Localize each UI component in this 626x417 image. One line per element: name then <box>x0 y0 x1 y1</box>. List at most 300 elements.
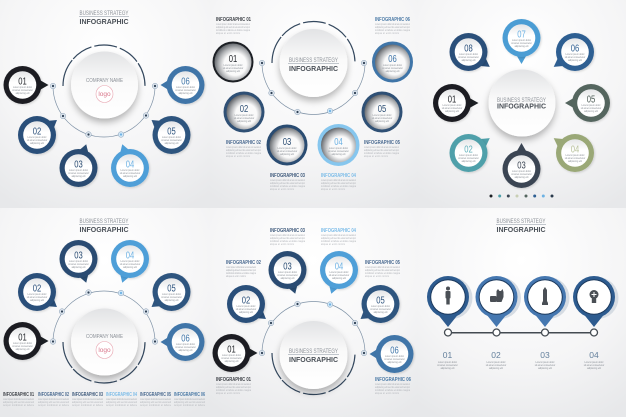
pin 03 <box>524 276 570 336</box>
label 01: INFOGRAPHIC 01 <box>216 377 251 383</box>
step 02: Lorem ipsum dolor <box>486 361 506 364</box>
center disc: title: INFOGRAPHIC <box>289 355 339 364</box>
icon: tower <box>542 287 548 305</box>
label 04: Lorem ipsum dolor sit amet consectetur <box>321 234 356 237</box>
bubble 04: adipiscing elit <box>123 175 137 178</box>
step 04: 04 <box>589 350 599 360</box>
bubble 02: 02 <box>33 284 42 294</box>
bubble 04: Lorem ipsum dolor <box>565 154 585 157</box>
bubble 05: sit amet consectetur <box>581 107 602 110</box>
center disc: title <box>280 321 348 389</box>
label 01 <box>216 377 252 395</box>
bubble 03: adipiscing elit <box>72 175 86 178</box>
label row <box>3 392 206 407</box>
center disc: company logo <box>71 308 138 376</box>
bubble 04: 04 <box>126 250 135 262</box>
bubble 07 <box>502 19 540 64</box>
bubble 03: sit amet consectetur <box>277 274 298 277</box>
icon: bulb <box>590 290 598 303</box>
bubble 05: adipiscing elit <box>165 142 179 145</box>
label 04: INFOGRAPHIC 04 <box>321 228 356 234</box>
bubble 04: sit amet consectetur <box>120 172 141 175</box>
label 06: incididunt ut labore et dolore magna <box>375 29 411 32</box>
center disc: title: INFOGRAPHIC <box>497 102 547 110</box>
bubble 04 <box>111 142 149 187</box>
node markers <box>259 301 367 356</box>
icon: puzzle and cat <box>490 289 504 302</box>
label 05: INFOGRAPHIC 05 <box>365 260 400 266</box>
bubble 05: Lorem ipsum dolor <box>162 293 181 296</box>
bubble 06 <box>549 33 594 73</box>
panel: top-left radial infographic <box>0 0 209 208</box>
label 05: incididunt ut labore et dolore magna <box>365 272 401 275</box>
center disc: title: BUSINESS STRATEGY <box>497 97 546 104</box>
bubble 06: Lorem ipsum dolor <box>385 355 404 358</box>
label row: adipiscing elit sed do eiusmod <box>3 401 35 404</box>
bubble 06: Lorem ipsum dolor <box>176 86 195 89</box>
label 02: INFOGRAPHIC 02 <box>226 260 261 266</box>
label row: Lorem ipsum dolor sit amet consectetur <box>38 398 69 401</box>
bubble 08: Lorem ipsum dolor <box>459 53 478 56</box>
node markers <box>50 83 158 137</box>
label row: adipiscing elit sed do eiusmod <box>174 401 206 404</box>
bubble 01: adipiscing elit <box>445 110 459 113</box>
pin 01 <box>427 276 472 336</box>
label row: tempor incididunt ut labore <box>72 404 104 407</box>
bubble 02 <box>227 285 271 325</box>
bubble 05 <box>565 84 610 122</box>
bubble 06 <box>370 335 414 373</box>
ring 04: adipiscing elit <box>332 153 346 156</box>
label row: Lorem ipsum dolor sit amet consectetur <box>106 398 137 401</box>
bubble 01: adipiscing elit <box>16 348 30 351</box>
node markers <box>259 60 367 115</box>
ring 01: adipiscing elit <box>226 70 240 73</box>
pin 04 <box>573 276 618 336</box>
label row: Lorem ipsum dolor sit amet consectetur <box>174 398 205 401</box>
bubble 03: sit amet consectetur <box>68 172 89 175</box>
step 04: sit amet consectetur <box>584 364 605 367</box>
bubble 04 <box>320 251 358 296</box>
label row: tempor incididunt ut labore <box>174 404 206 407</box>
bubble 04 <box>111 240 149 285</box>
bubble 04: 04 <box>126 160 135 170</box>
bubble 02 <box>450 132 494 172</box>
bubble 04: Lorem ipsum dolor <box>120 260 140 263</box>
label 03: adipiscing elit sed do eiusmod tempor <box>270 237 305 240</box>
panel: top-right eight-step infographic <box>417 0 626 208</box>
step 01: sit amet consectetur <box>437 364 458 367</box>
title <box>79 218 129 234</box>
label 03: Lorem ipsum dolor sit amet consectetur <box>270 179 305 182</box>
bubble 02: 02 <box>464 144 473 156</box>
title: INFOGRAPHIC <box>80 17 129 26</box>
label 05: adipiscing elit sed do eiusmod tempor <box>365 269 400 272</box>
label 02 <box>226 260 261 278</box>
label 02: incididunt ut labore et dolore magna <box>226 152 262 155</box>
bubble 03: Lorem ipsum dolor <box>69 260 88 263</box>
ring 05: sit amet consectetur <box>372 117 393 120</box>
panel: bottom-middle arch infographic with labels <box>209 208 417 417</box>
bubble 05: adipiscing elit <box>584 110 598 113</box>
label row: INFOGRAPHIC 01 <box>3 392 34 398</box>
bubble 06: 06 <box>571 44 580 54</box>
label row: adipiscing elit sed do eiusmod <box>106 401 138 404</box>
bubble 01: 01 <box>227 344 236 356</box>
step 01 <box>437 350 458 370</box>
bubble 02: adipiscing elit <box>462 160 476 163</box>
ring 01 <box>212 42 254 82</box>
bubble 08 <box>450 33 494 73</box>
bubble 04: adipiscing elit <box>568 160 582 163</box>
label 02 <box>226 140 262 158</box>
center disc: title: INFOGRAPHIC <box>289 64 339 73</box>
ring 06: Lorem ipsum dolor <box>383 64 402 67</box>
bubble 01: sit amet consectetur <box>221 357 242 360</box>
bubble 04: sit amet consectetur <box>329 274 350 277</box>
bubble 06: adipiscing elit <box>568 59 582 62</box>
bubble 01 <box>212 334 258 372</box>
ring 02: sit amet consectetur <box>234 117 255 120</box>
center disc: title: BUSINESS STRATEGY <box>289 348 338 355</box>
bubble 01 <box>433 84 478 122</box>
bubble 06: 06 <box>181 334 190 344</box>
bubble 03: Lorem ipsum dolor <box>512 170 531 173</box>
label 02: Lorem ipsum dolor sit amet consectetur <box>226 146 261 149</box>
bubble 05: Lorem ipsum dolor <box>581 104 601 107</box>
label row: adipiscing elit sed do eiusmod <box>38 401 70 404</box>
bubble 08: sit amet consectetur <box>458 56 479 59</box>
bubble 04: sit amet consectetur <box>120 263 141 266</box>
bubble 06 <box>160 323 204 361</box>
label row: Lorem ipsum dolor sit amet consectetur <box>3 398 34 401</box>
step 01: 01 <box>443 350 452 360</box>
ring 03: sit amet consectetur <box>277 150 298 153</box>
step 03: 03 <box>540 350 550 360</box>
bubble 02: adipiscing elit <box>30 299 44 302</box>
bubble 03 <box>60 142 98 187</box>
bubble 03: 03 <box>74 160 83 170</box>
label 04: INFOGRAPHIC 04 <box>321 173 356 179</box>
step 04 <box>584 350 605 370</box>
center disc: title <box>280 29 348 97</box>
label 04: adipiscing elit sed do eiusmod tempor <box>321 237 356 240</box>
connector arcs <box>53 45 155 137</box>
label 06: adipiscing elit sed do eiusmod tempor <box>375 26 410 29</box>
bubble 06: adipiscing elit <box>179 349 193 352</box>
title <box>79 10 129 26</box>
bubble 05 <box>147 273 190 313</box>
bubble 02: Lorem ipsum dolor <box>236 305 256 308</box>
bubble 06: adipiscing elit <box>388 361 402 364</box>
label row: INFOGRAPHIC 03 <box>72 392 103 398</box>
label 04: incididunt ut labore et dolore magna <box>321 185 357 188</box>
label 01: INFOGRAPHIC 01 <box>216 17 251 23</box>
bubble 06: sit amet consectetur <box>175 346 196 349</box>
bubble 01 <box>4 66 48 104</box>
bubble 02: 02 <box>33 126 42 138</box>
bubble 03: 03 <box>283 262 292 272</box>
label row: Lorem ipsum dolor sit amet consectetur <box>72 398 103 401</box>
label 04: adipiscing elit sed do eiusmod tempor <box>321 182 356 185</box>
bubble 02: sit amet consectetur <box>27 296 48 299</box>
panel: top-middle radial infographic with labels <box>209 0 417 208</box>
bubble 01: Lorem ipsum dolor <box>13 342 32 345</box>
title: BUSINESS STRATEGY <box>496 218 546 225</box>
bubble 04 <box>549 132 594 172</box>
bubble 03: adipiscing elit <box>515 176 529 179</box>
label 05: Lorem ipsum dolor sit amet consectetur <box>365 266 400 269</box>
connector arcs <box>262 302 365 394</box>
bubble 02: Lorem ipsum dolor <box>459 154 478 157</box>
bubble 07: adipiscing elit <box>515 45 529 48</box>
label row: tempor incididunt ut labore <box>38 404 70 407</box>
bubble 02: adipiscing elit <box>30 142 44 145</box>
bubble 01: sit amet consectetur <box>442 107 463 110</box>
bubble 04: 04 <box>571 144 580 156</box>
ring 01: Lorem ipsum dolor <box>223 64 243 67</box>
bubble 01: 01 <box>18 332 27 344</box>
ring 02 <box>224 92 264 132</box>
bubble 02: sit amet consectetur <box>236 308 257 311</box>
step 03: Lorem ipsum dolor <box>535 361 555 364</box>
ring 03: adipiscing elit <box>280 153 294 156</box>
label 05: aliqua ut enim minim <box>364 155 388 158</box>
title <box>496 218 546 234</box>
label 06 <box>375 377 411 395</box>
bubble 01: adipiscing elit <box>225 360 239 363</box>
label row: tempor incididunt ut labore <box>3 404 35 407</box>
ring 06 <box>372 42 413 82</box>
label 06: Lorem ipsum dolor sit amet consectetur <box>375 383 410 386</box>
label 03: INFOGRAPHIC 03 <box>270 228 305 234</box>
bubble 05: adipiscing elit <box>374 311 388 314</box>
pin 02 <box>476 276 521 336</box>
bubble 06: 06 <box>390 346 399 356</box>
label 06: incididunt ut labore et dolore magna <box>375 389 411 392</box>
bubble 07: 07 <box>517 30 526 40</box>
center disc: title: BUSINESS STRATEGY <box>289 57 338 64</box>
title: INFOGRAPHIC <box>80 225 129 234</box>
bubble 03: Lorem ipsum dolor <box>278 271 297 274</box>
label 02: aliqua ut enim minim <box>226 275 246 278</box>
label 03: aliqua ut enim minim <box>270 243 294 246</box>
label 02: Lorem ipsum dolor sit amet consectetur <box>226 266 256 269</box>
bubble 05: Lorem ipsum dolor <box>162 136 181 139</box>
bubble 02: Lorem ipsum dolor <box>27 136 47 139</box>
ring 04: sit amet consectetur <box>328 150 349 153</box>
label 05 <box>364 140 400 158</box>
bubble 02 <box>18 114 62 154</box>
bubble 05: sit amet consectetur <box>161 296 182 299</box>
bubble 02: Lorem ipsum dolor <box>27 293 47 296</box>
bubble 03: Lorem ipsum dolor <box>69 169 88 172</box>
label row: tempor incididunt ut labore <box>140 404 172 407</box>
step 03 <box>535 350 556 370</box>
bubble 08: 08 <box>464 44 473 54</box>
bubble 04: Lorem ipsum dolor <box>120 169 140 172</box>
bubble 03: sit amet consectetur <box>68 263 89 266</box>
label 06: aliqua ut enim minim <box>375 32 399 35</box>
bubble 03: adipiscing elit <box>281 277 295 280</box>
label row: Lorem ipsum dolor sit amet consectetur <box>140 398 171 401</box>
label 03: aliqua ut enim minim <box>270 188 294 191</box>
bubble 05: sit amet consectetur <box>161 139 182 142</box>
ring 05: Lorem ipsum dolor <box>372 114 392 117</box>
label 01: adipiscing elit sed do eiusmod tempor <box>216 26 250 29</box>
bubble 04: adipiscing elit <box>332 277 346 280</box>
ring 04 <box>318 124 360 166</box>
bubble 03 <box>60 240 98 285</box>
label 02: incididunt ut labore et dolore magna <box>226 272 257 275</box>
bubble 05: 05 <box>587 94 596 106</box>
connector arcs <box>262 21 365 114</box>
label 05: incididunt ut labore et dolore magna <box>364 152 400 155</box>
label 01: incididunt ut labore et dolore magna <box>216 29 251 32</box>
bubble 02: sit amet consectetur <box>27 139 48 142</box>
label 02: adipiscing elit sed do eiusmod tempor <box>226 269 256 272</box>
center disc: company logo <box>71 52 138 118</box>
title: INFOGRAPHIC <box>496 225 546 234</box>
bubble 06: sit amet consectetur <box>565 56 586 59</box>
bubble 05: adipiscing elit <box>165 299 179 302</box>
ring 06: adipiscing elit <box>386 70 400 73</box>
bubble 04: Lorem ipsum dolor <box>329 271 349 274</box>
bubble 05: 05 <box>376 296 385 306</box>
step 02: adipiscing elit <box>489 367 503 370</box>
step 03: adipiscing elit <box>538 367 552 370</box>
label 06: adipiscing elit sed do eiusmod tempor <box>375 386 410 389</box>
bubble 01: adipiscing elit <box>16 92 30 95</box>
label 04: Lorem ipsum dolor sit amet consectetur <box>321 179 356 182</box>
bubble 03 <box>268 251 306 296</box>
bubble 05 <box>147 114 190 154</box>
label 01: aliqua ut enim minim <box>216 32 240 35</box>
bubble 03: 03 <box>517 160 526 172</box>
bubble 07: Lorem ipsum dolor <box>512 39 531 42</box>
step 01: Lorem ipsum dolor <box>438 361 457 364</box>
label 05: adipiscing elit sed do eiusmod tempor <box>364 149 399 152</box>
label 04 <box>321 173 357 191</box>
label row: INFOGRAPHIC 04 <box>106 392 137 398</box>
bubble 05: sit amet consectetur <box>370 308 391 311</box>
step 02 <box>486 350 507 370</box>
label 06: aliqua ut enim minim <box>375 392 399 395</box>
label 03 <box>270 228 306 246</box>
bubble 03 <box>502 143 540 188</box>
bubble 06: adipiscing elit <box>179 92 193 95</box>
title: BUSINESS STRATEGY <box>80 10 129 17</box>
step 02: sit amet consectetur <box>486 364 507 367</box>
bubble 01: sit amet consectetur <box>12 345 33 348</box>
label 03: incididunt ut labore et dolore magna <box>270 240 306 243</box>
ring 04: 04 <box>334 137 343 148</box>
ring 06: sit amet consectetur <box>382 67 403 70</box>
bubble 06: sit amet consectetur <box>175 89 196 92</box>
bubble 01: Lorem ipsum dolor <box>222 354 241 357</box>
title: BUSINESS STRATEGY <box>80 218 129 225</box>
label 01: aliqua ut enim minim <box>216 392 240 395</box>
label 04: incididunt ut labore et dolore magna <box>321 240 357 243</box>
label 05: Lorem ipsum dolor sit amet consectetur <box>364 146 399 149</box>
ring 03: Lorem ipsum dolor <box>277 147 297 150</box>
ring 03: 03 <box>283 137 292 148</box>
label 06 <box>375 17 411 35</box>
bubble 04: 04 <box>335 262 344 272</box>
label 03: INFOGRAPHIC 03 <box>270 173 305 179</box>
label 02: aliqua ut enim minim <box>226 155 250 158</box>
label 01: Lorem ipsum dolor sit amet consectetur <box>216 383 251 386</box>
center disc: company logo: logo <box>98 91 111 98</box>
bubble 01: sit amet consectetur <box>12 89 33 92</box>
label row: tempor incididunt ut labore <box>106 404 138 407</box>
ring 01: sit amet consectetur <box>223 67 244 70</box>
label 03 <box>270 173 306 191</box>
bubble 02: adipiscing elit <box>239 311 253 314</box>
bubble 03: 03 <box>74 250 83 262</box>
step 04: Lorem ipsum dolor <box>584 361 604 364</box>
ring 05 <box>362 92 402 132</box>
ring 01: 01 <box>229 54 238 65</box>
ring 02: Lorem ipsum dolor <box>234 114 254 117</box>
ring 02: adipiscing elit <box>237 120 251 123</box>
ring 05: 05 <box>378 104 387 115</box>
step 04: adipiscing elit <box>587 367 601 370</box>
center disc: company logo: logo <box>98 347 111 354</box>
ring 04: Lorem ipsum dolor <box>329 147 348 150</box>
node markers <box>50 290 158 344</box>
label row: INFOGRAPHIC 02 <box>38 392 69 398</box>
bubble 01: Lorem ipsum dolor <box>13 86 32 89</box>
timeline line <box>448 332 594 334</box>
bubble 01: 01 <box>18 76 27 88</box>
panel: bottom-right timeline infographic <box>417 208 626 417</box>
label 04 <box>321 228 357 246</box>
label 01 <box>216 17 251 35</box>
label row: adipiscing elit sed do eiusmod <box>72 401 104 404</box>
bubble 05: 05 <box>167 284 176 294</box>
ring 06: 06 <box>388 54 397 65</box>
label row: INFOGRAPHIC 05 <box>140 392 171 398</box>
label row: adipiscing elit sed do eiusmod <box>140 401 172 404</box>
bubble 06: sit amet consectetur <box>384 358 405 361</box>
icon: person <box>446 286 450 304</box>
bubble 08: adipiscing elit <box>462 59 476 62</box>
ring 02: 02 <box>240 104 249 115</box>
pagination dots <box>490 194 554 198</box>
center disc: company logo: COMPANY NAME <box>86 334 123 340</box>
label 05: INFOGRAPHIC 05 <box>364 140 400 146</box>
bubble 06: Lorem ipsum dolor <box>565 53 585 56</box>
center disc: company logo: COMPANY NAME <box>86 78 123 84</box>
label 02: adipiscing elit sed do eiusmod tempor <box>226 149 261 152</box>
bubble 04: sit amet consectetur <box>565 157 586 160</box>
bubble 01: 01 <box>448 94 457 106</box>
label 03: adipiscing elit sed do eiusmod tempor <box>270 182 305 185</box>
bubble 05: 05 <box>167 126 176 138</box>
label 04: aliqua ut enim minim <box>321 243 345 246</box>
bubble 03: sit amet consectetur <box>511 173 532 176</box>
label row: INFOGRAPHIC 06 <box>174 392 205 398</box>
label 01: adipiscing elit sed do eiusmod tempor <box>216 386 251 389</box>
label 06: INFOGRAPHIC 06 <box>375 377 411 383</box>
label 01: incididunt ut labore et dolore magna <box>216 389 252 392</box>
bubble 02 <box>18 273 62 313</box>
label 03: incididunt ut labore et dolore magna <box>270 185 306 188</box>
bubble 01: Lorem ipsum dolor <box>442 104 462 107</box>
bubble 07: sit amet consectetur <box>511 42 532 45</box>
label 02: INFOGRAPHIC 02 <box>226 140 261 146</box>
